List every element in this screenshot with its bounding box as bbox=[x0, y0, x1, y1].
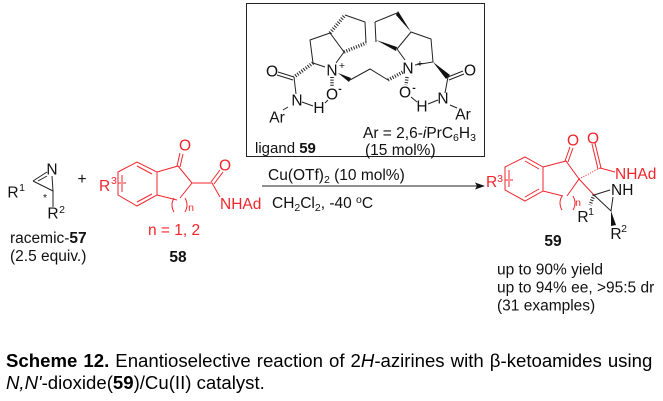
catalyst conditions: Cu(OTf) bbox=[268, 167, 324, 184]
reactant: ketoamide 58: NHAd bbox=[220, 196, 261, 213]
reactant: azirine 57 bbox=[7, 162, 87, 265]
solvent and temperature: C bbox=[362, 195, 373, 212]
ligand structure: left half: N bbox=[326, 62, 338, 80]
reactant: ketoamide 58: O bbox=[179, 138, 191, 154]
reactant: azirine 57: R bbox=[7, 184, 19, 202]
product 59: O bbox=[587, 130, 599, 148]
product 59: R bbox=[486, 174, 497, 191]
solvent and temperature: , -40 bbox=[321, 195, 356, 212]
Ar definition: 6 bbox=[453, 132, 459, 144]
solvent and temperature: o bbox=[356, 194, 362, 206]
product 59: NHAd bbox=[615, 166, 656, 183]
ligand structure: right half: N bbox=[437, 90, 449, 108]
solvent and temperature: CH bbox=[272, 195, 294, 212]
product 59: 1 bbox=[588, 206, 594, 218]
product 59: 3 bbox=[497, 173, 503, 185]
reactant: ketoamide 58: R bbox=[99, 178, 110, 195]
solvent and temperature: 2 bbox=[294, 202, 300, 214]
reactant: azirine 57: 2 bbox=[59, 204, 65, 216]
reactant: azirine 57: R bbox=[47, 206, 59, 222]
reactant: azirine 57: * bbox=[43, 192, 47, 204]
catalyst conditions: 2 bbox=[324, 174, 330, 186]
caption: Scheme 12. Enantioselective reaction of 2H-azirines with β-ketoamides using bbox=[6, 350, 652, 371]
product 59: n bbox=[575, 197, 581, 209]
ligand structure: right half bbox=[375, 11, 476, 124]
propyl linker bbox=[350, 69, 388, 80]
reactant: ketoamide 58: O bbox=[219, 158, 231, 174]
ligand structure: right half: N bbox=[402, 60, 414, 78]
ligand structure: right half: H bbox=[416, 98, 428, 116]
solvent and temperature: Cl bbox=[300, 195, 315, 212]
results summary: (31 examples) bbox=[497, 298, 595, 314]
ligand structure: left half: O bbox=[266, 64, 278, 80]
label: racemic-57: racemic-57 bbox=[10, 230, 87, 247]
product 59: R bbox=[610, 226, 622, 243]
ligand structure: right half: Ar bbox=[455, 106, 471, 124]
product 59: R bbox=[577, 209, 589, 226]
ligand structure: left half: H bbox=[313, 100, 325, 117]
solvent and temperature: 2 bbox=[315, 202, 321, 214]
Ar definition: Ar = 2,6-iPrC bbox=[363, 125, 453, 142]
reactant: ketoamide 58: 3 bbox=[111, 175, 117, 187]
reactant: azirine 57: 1 bbox=[19, 182, 25, 194]
ligand structure: right half: O bbox=[464, 62, 476, 80]
label: 59: 59 bbox=[544, 233, 562, 250]
caption bbox=[6, 350, 652, 393]
ligand label: ligand 59 bbox=[255, 140, 316, 157]
panel: ligand 59 box bbox=[246, 4, 484, 159]
catalyst conditions: (10 mol%) bbox=[330, 167, 405, 184]
ligand structure: left half bbox=[266, 15, 366, 126]
caption: N,N'-dioxide(59)/Cu(II) catalyst. bbox=[6, 372, 265, 393]
product 59: NH bbox=[611, 182, 633, 199]
ligand structure: left half: - bbox=[338, 83, 342, 95]
product 59: O bbox=[567, 132, 579, 150]
ligand structure: left half: Ar bbox=[269, 110, 285, 126]
label: 58: 58 bbox=[169, 249, 187, 266]
ligand loading: (15 mol%) bbox=[365, 142, 436, 159]
ligand structure: right half: O bbox=[399, 84, 411, 102]
ligand structure: right half: + bbox=[417, 58, 423, 70]
Ar definition: H bbox=[459, 125, 470, 142]
results summary bbox=[497, 262, 654, 314]
reactant: ketoamide 58 bbox=[99, 138, 261, 239]
ligand structure: left half: + bbox=[339, 60, 345, 72]
label: n values: n = 1, 2 bbox=[148, 222, 200, 239]
reactant: ketoamide 58: n bbox=[188, 202, 194, 214]
equivalents: (2.5 equiv.) bbox=[10, 248, 86, 265]
ligand structure: left half: O bbox=[326, 86, 338, 104]
product 59 bbox=[486, 130, 656, 250]
ligand structure: left half: N bbox=[291, 92, 303, 110]
reaction arrow bbox=[262, 182, 485, 190]
Ar definition: 3 bbox=[470, 132, 476, 144]
product 59: 2 bbox=[621, 223, 627, 235]
results summary: up to 94% ee, >95:5 dr bbox=[497, 280, 654, 296]
ligand structure: right half: - bbox=[412, 82, 416, 94]
reactant: azirine 57: N bbox=[46, 162, 58, 178]
plus sign: + bbox=[77, 171, 87, 188]
results summary: up to 90% yield bbox=[497, 262, 603, 278]
